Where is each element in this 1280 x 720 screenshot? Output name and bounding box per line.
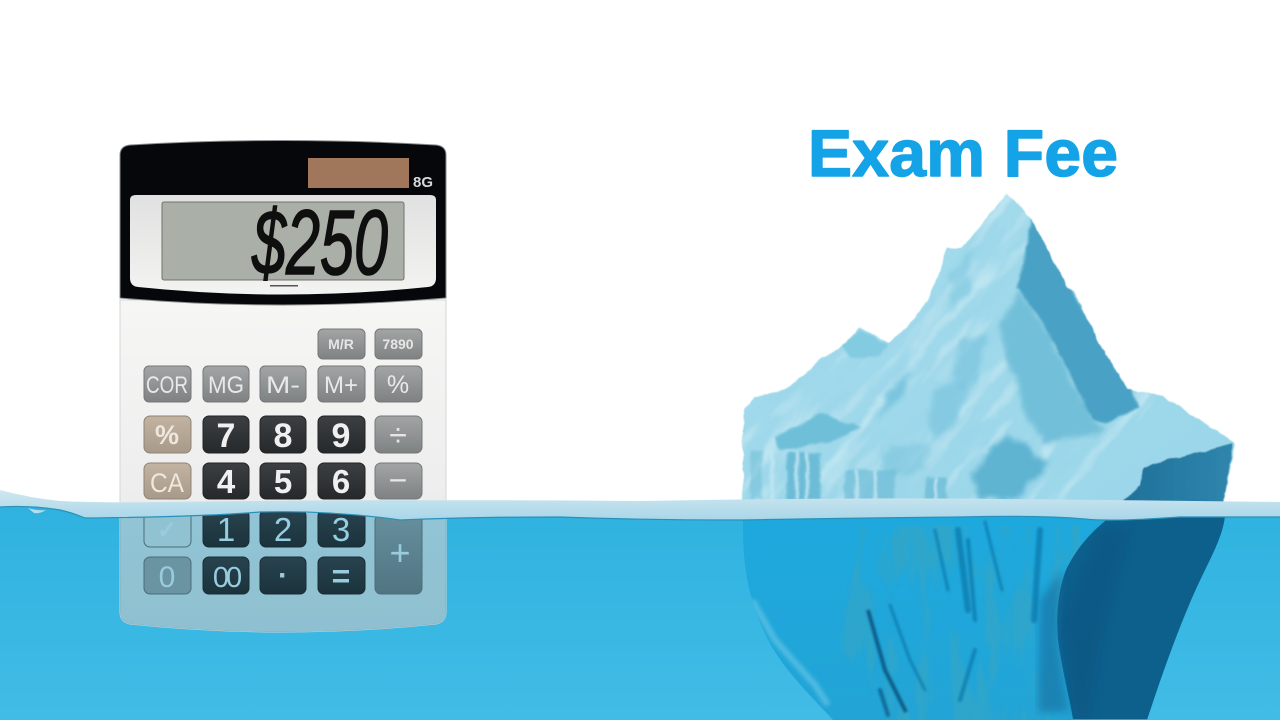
calculator	[115, 140, 450, 640]
keypad row 1	[144, 366, 422, 402]
keypad row 1: COR	[146, 372, 188, 399]
keypad plus key: +	[389, 532, 411, 573]
keypad row 5	[144, 557, 365, 594]
keypad row 3: 4	[217, 463, 236, 500]
calculator top housing	[120, 140, 446, 305]
iceberg underwater	[740, 510, 1230, 720]
iceberg underwater pale edge	[752, 600, 828, 705]
lcd amount: $250	[251, 192, 388, 294]
keypad row 3: 6	[332, 463, 350, 500]
iceberg secondary peak shade	[842, 330, 887, 358]
keypad row 4: ✓	[157, 517, 177, 544]
iceberg mid-tone face	[1000, 287, 1107, 447]
keypad row 4: 2	[274, 511, 292, 548]
keypad row 5: =	[332, 558, 350, 594]
iceberg cliff light streaks	[772, 450, 936, 502]
keypad row 4: 1	[217, 511, 235, 548]
waterline band	[0, 490, 1280, 520]
iceberg underwater streak texture	[840, 525, 1080, 720]
iceberg above water	[741, 194, 1236, 502]
iceberg underwater shadow side	[1057, 515, 1228, 719]
keypad row 2: %	[155, 420, 179, 450]
keypad row 5: 0	[159, 561, 175, 594]
keypad row 3: −	[389, 462, 407, 498]
keypad row 4	[144, 510, 365, 548]
water	[0, 505, 1280, 720]
iceberg left patch	[775, 413, 860, 450]
keypad row 3: CA	[150, 468, 184, 498]
iceberg lower shadow	[970, 433, 1047, 500]
iceberg dark shelf	[1120, 443, 1233, 504]
iceberg gully shades	[875, 250, 985, 480]
keypad row 3: 5	[274, 463, 292, 500]
calculator body	[120, 300, 446, 632]
iceberg underwater dark crack	[868, 610, 906, 712]
iceberg underwater streaks	[880, 522, 1040, 715]
keypad row 1: %	[387, 371, 409, 399]
model line	[270, 285, 298, 286]
keypad row 2: ÷	[389, 417, 407, 453]
keypad row 2	[144, 416, 422, 455]
keypad row 3	[144, 462, 422, 500]
iceberg surface striations	[742, 194, 1152, 500]
keypad row 5: 00	[213, 562, 241, 594]
brand mark: 8G	[413, 174, 433, 191]
keypad row 0	[318, 329, 422, 359]
keypad row 1: MG	[208, 372, 244, 399]
keypad row 1: M-	[266, 372, 300, 399]
lcd screen	[162, 202, 404, 280]
keypad plus key	[375, 515, 422, 594]
iceberg cliff	[750, 450, 947, 504]
calculator submerged tint	[120, 512, 446, 632]
keypad row 4: 3	[332, 511, 350, 548]
keypad row 0: 7890	[382, 336, 414, 352]
keypad row 5: ·	[278, 559, 288, 592]
solar panel	[308, 158, 409, 188]
iceberg shaded face	[1017, 215, 1138, 423]
display bezel	[130, 195, 436, 294]
calculator submerged teal wash	[120, 512, 446, 632]
keypad row 2: 8	[274, 417, 292, 455]
keypad row 1: M+	[324, 372, 358, 399]
keypad row 0: M/R	[328, 336, 354, 352]
keypad row 2: 9	[332, 417, 350, 455]
keypad row 2: 7	[217, 417, 235, 455]
title: Exam Fee	[808, 116, 1118, 190]
